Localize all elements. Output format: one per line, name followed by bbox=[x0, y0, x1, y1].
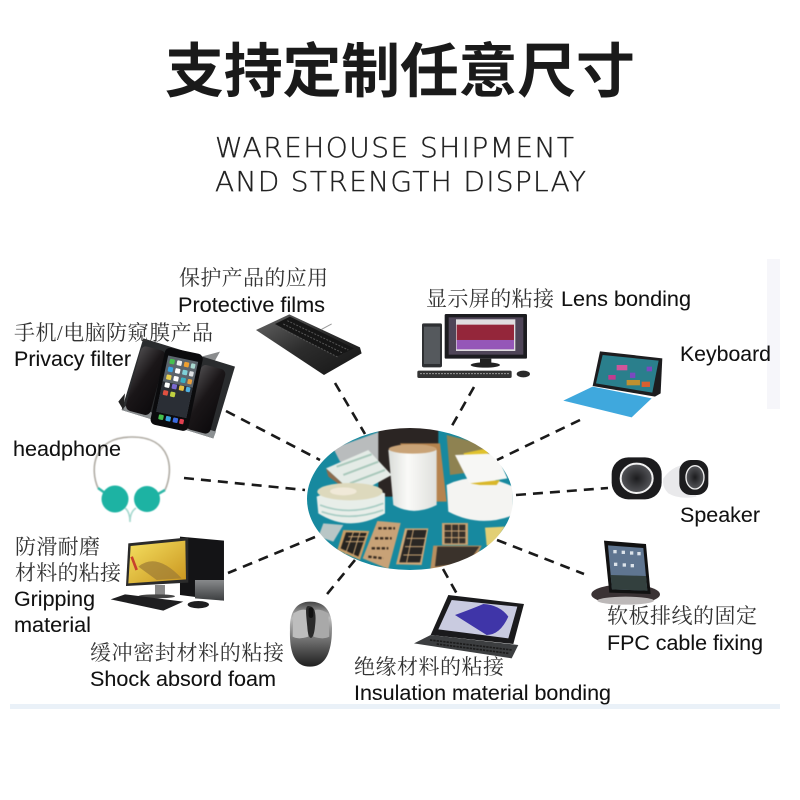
left leaning roll bbox=[326, 450, 392, 486]
subtitle: AND STRENGTH DISPLAY bbox=[215, 165, 586, 198]
label: speaker: Speaker bbox=[680, 503, 760, 527]
label: lens bonding: Lens bonding bbox=[561, 287, 691, 311]
label: lens bonding: 显示屏的粘接 bbox=[426, 287, 555, 311]
label: gripping material: 材料的粘接 bbox=[15, 561, 122, 585]
right roll bbox=[447, 478, 513, 521]
label: privacy filter bbox=[14, 321, 213, 371]
label: protective films bbox=[178, 266, 328, 317]
label: shock absorb foam: Shock absord foam bbox=[90, 667, 276, 691]
icon: privacy filter phones bbox=[118, 338, 235, 438]
center photo: tape rolls bbox=[307, 428, 513, 570]
icon: tablet on dock bbox=[591, 541, 660, 605]
subtitle: WAREHOUSE SHIPMENT bbox=[215, 131, 574, 164]
dashed connectors bbox=[184, 383, 608, 599]
icon: speakers bbox=[612, 457, 708, 499]
icon: computer mouse bbox=[290, 602, 332, 667]
icon: headphone bbox=[94, 437, 169, 522]
label: insulation material bonding: 绝缘材料的粘接 bbox=[354, 655, 505, 679]
label: shock absorb foam: 缓冲密封材料的粘接 bbox=[90, 641, 285, 665]
icon: surface tablet with blue keyboard bbox=[563, 351, 662, 417]
label: fpc cable fixing: 软板排线的固定 bbox=[607, 604, 757, 628]
icon: desktop computer with display bbox=[417, 314, 530, 378]
icon: keyboard bbox=[256, 314, 362, 375]
label: keyboard: Keyboard bbox=[680, 342, 771, 366]
label: fpc cable fixing: FPC cable fixing bbox=[607, 631, 763, 655]
label: shock absorb foam bbox=[90, 641, 285, 691]
label: insulation material bonding: Insulation material bonding bbox=[354, 681, 611, 705]
label: protective films: Protective films bbox=[178, 293, 325, 317]
label: gripping material: 防滑耐磨 bbox=[15, 535, 100, 559]
label: fpc cable fixing bbox=[607, 604, 763, 655]
icon: sony vaio slider laptop bbox=[414, 595, 524, 658]
label: privacy filter: 手机/电脑防窥膜产品 bbox=[14, 321, 213, 345]
label: privacy filter: Privacy filter bbox=[14, 347, 131, 371]
label: protective films: 保护产品的应用 bbox=[179, 266, 328, 290]
die cut sheets bbox=[318, 523, 343, 542]
label: gripping material bbox=[14, 535, 122, 637]
label: insulation material bonding bbox=[354, 655, 611, 705]
label: headphone: headphone bbox=[13, 437, 121, 461]
left roll bbox=[317, 488, 385, 523]
label: gripping material: Gripping bbox=[14, 587, 95, 611]
title: 支持定制任意尺寸 bbox=[165, 39, 635, 105]
background panel edges bbox=[10, 259, 780, 709]
label: gripping material: material bbox=[14, 613, 91, 637]
subtitle bbox=[215, 131, 586, 198]
center roll bbox=[388, 445, 437, 511]
label: lens bonding bbox=[426, 287, 691, 311]
icon: desktop computer with yellow screen bbox=[111, 537, 224, 611]
